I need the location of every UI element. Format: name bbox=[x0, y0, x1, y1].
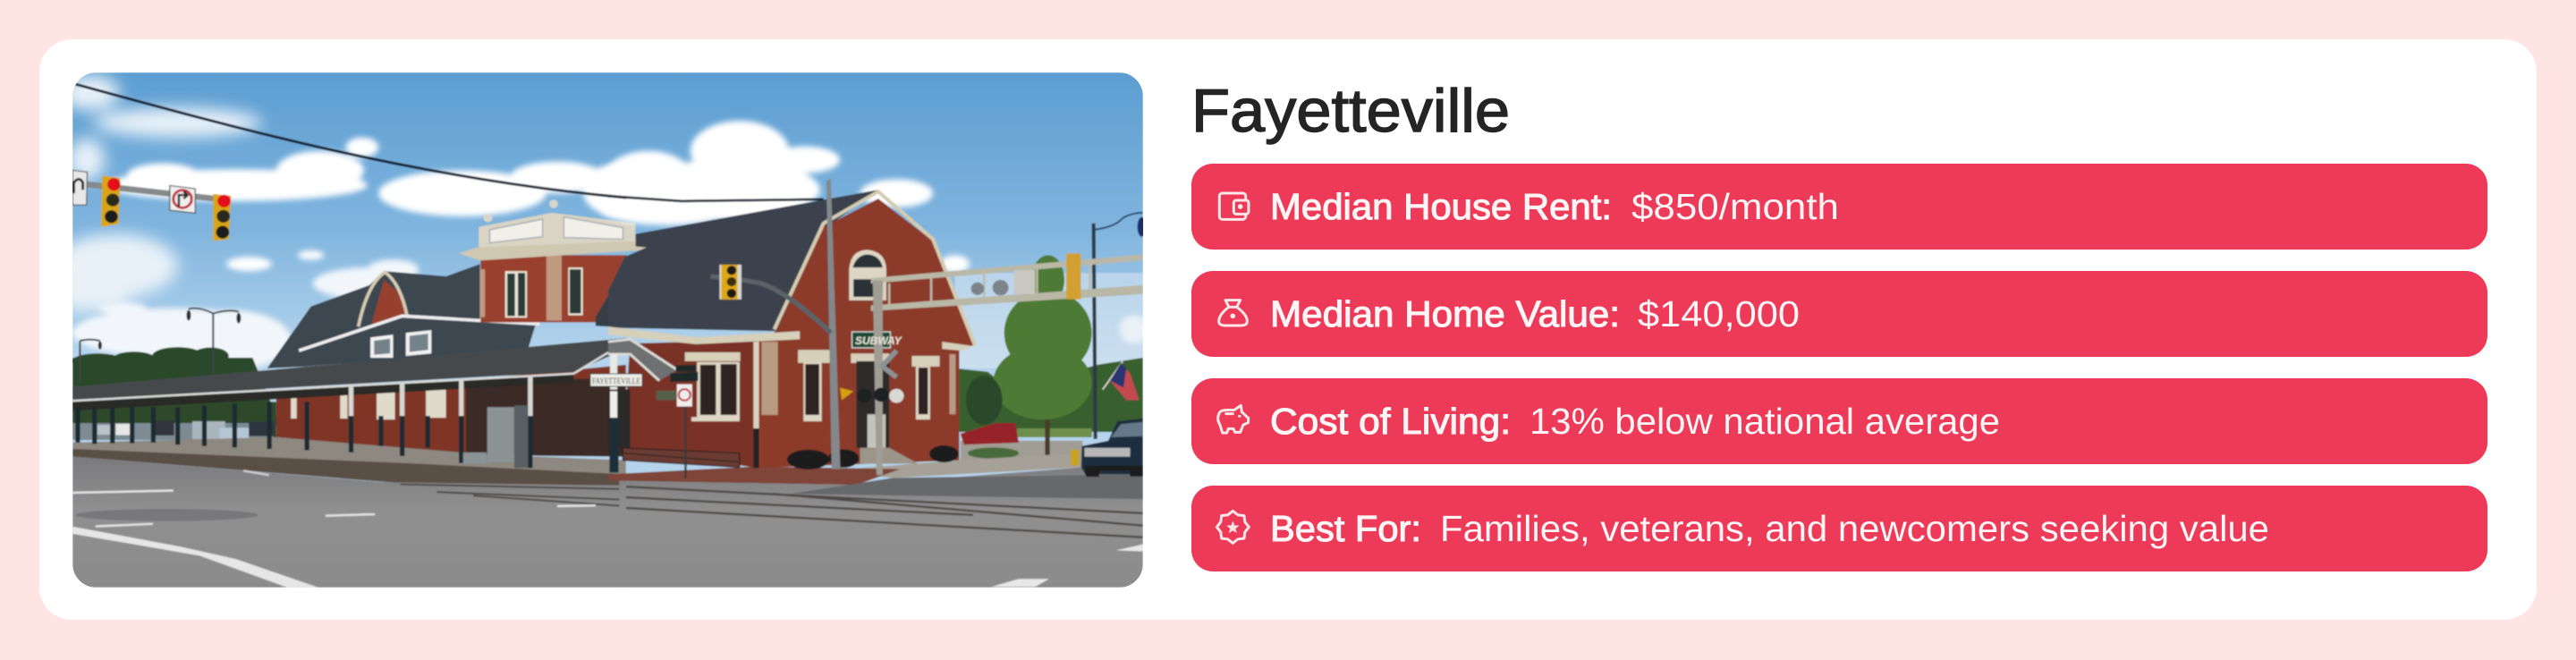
road markings bbox=[72, 491, 596, 588]
value: $140,000 bbox=[1638, 293, 1800, 334]
red car bbox=[961, 423, 1019, 444]
icon: star badge bbox=[1216, 511, 1249, 543]
planters bbox=[787, 445, 959, 470]
brick wall under canopy bbox=[276, 365, 626, 457]
icon: piggy bank bbox=[1218, 405, 1249, 433]
right clouds bbox=[601, 121, 1148, 343]
railing bbox=[623, 448, 740, 468]
sign post bbox=[609, 393, 619, 418]
electrical cabinets bbox=[463, 407, 514, 464]
fire hydrant bbox=[1071, 450, 1079, 466]
mansard roof left wing bbox=[267, 264, 480, 368]
lower dormer bbox=[303, 317, 536, 367]
canopy roof bbox=[72, 338, 626, 400]
sidewalk and brick walkway bbox=[860, 454, 1079, 479]
title: Fayetteville bbox=[1191, 77, 1510, 145]
road right bbox=[619, 468, 1143, 588]
pale horizon bbox=[955, 273, 1143, 368]
clouds left bbox=[54, 75, 641, 370]
label: Best For: bbox=[1270, 508, 1421, 549]
label: Median House Rent: bbox=[1270, 186, 1612, 227]
row: median home value bbox=[1191, 271, 2487, 357]
small canopy and post bbox=[606, 338, 677, 448]
rail crossing gantry bbox=[840, 253, 1143, 475]
value: $850/month bbox=[1631, 186, 1839, 227]
depot name sign bbox=[590, 374, 642, 386]
main gable roof bbox=[608, 190, 878, 331]
green tree bbox=[966, 255, 1092, 466]
street signs bbox=[657, 365, 698, 478]
overhead wire left bbox=[75, 84, 626, 198]
value: 13% below national average bbox=[1530, 401, 2000, 442]
photo: Fayetteville train depot bbox=[54, 72, 1148, 588]
road surface bbox=[72, 457, 626, 588]
brick gable building bbox=[608, 191, 975, 468]
icon: wallet bbox=[1219, 193, 1249, 219]
label: Cost of Living: bbox=[1270, 401, 1511, 442]
street lamps bbox=[80, 309, 241, 383]
tower bbox=[459, 199, 647, 327]
background trees and grass bbox=[955, 358, 1143, 468]
overhead wire right bbox=[608, 196, 824, 201]
platform and tracks bbox=[72, 437, 626, 476]
shop sign text: SUBWAY bbox=[855, 334, 902, 347]
american flag bbox=[1103, 361, 1140, 400]
signal arm bbox=[710, 265, 831, 333]
row: cost of living bbox=[1191, 378, 2487, 464]
icon: money bag bbox=[1219, 300, 1247, 326]
parked cars bbox=[72, 420, 275, 440]
street lamp and truck bbox=[1081, 213, 1146, 477]
mast arm with signals bbox=[72, 170, 231, 241]
depot name sign: FAYETTEVILLE bbox=[592, 377, 640, 386]
label: Median Home Value: bbox=[1270, 293, 1620, 334]
tree line bbox=[72, 347, 280, 425]
subway sign bbox=[852, 332, 890, 348]
row: best for bbox=[1191, 486, 2487, 571]
row: median house rent bbox=[1191, 164, 2487, 250]
canopy columns bbox=[78, 376, 530, 468]
value: Families, veterans, and newcomers seeking value bbox=[1440, 508, 2269, 549]
utility pole bbox=[826, 179, 840, 469]
